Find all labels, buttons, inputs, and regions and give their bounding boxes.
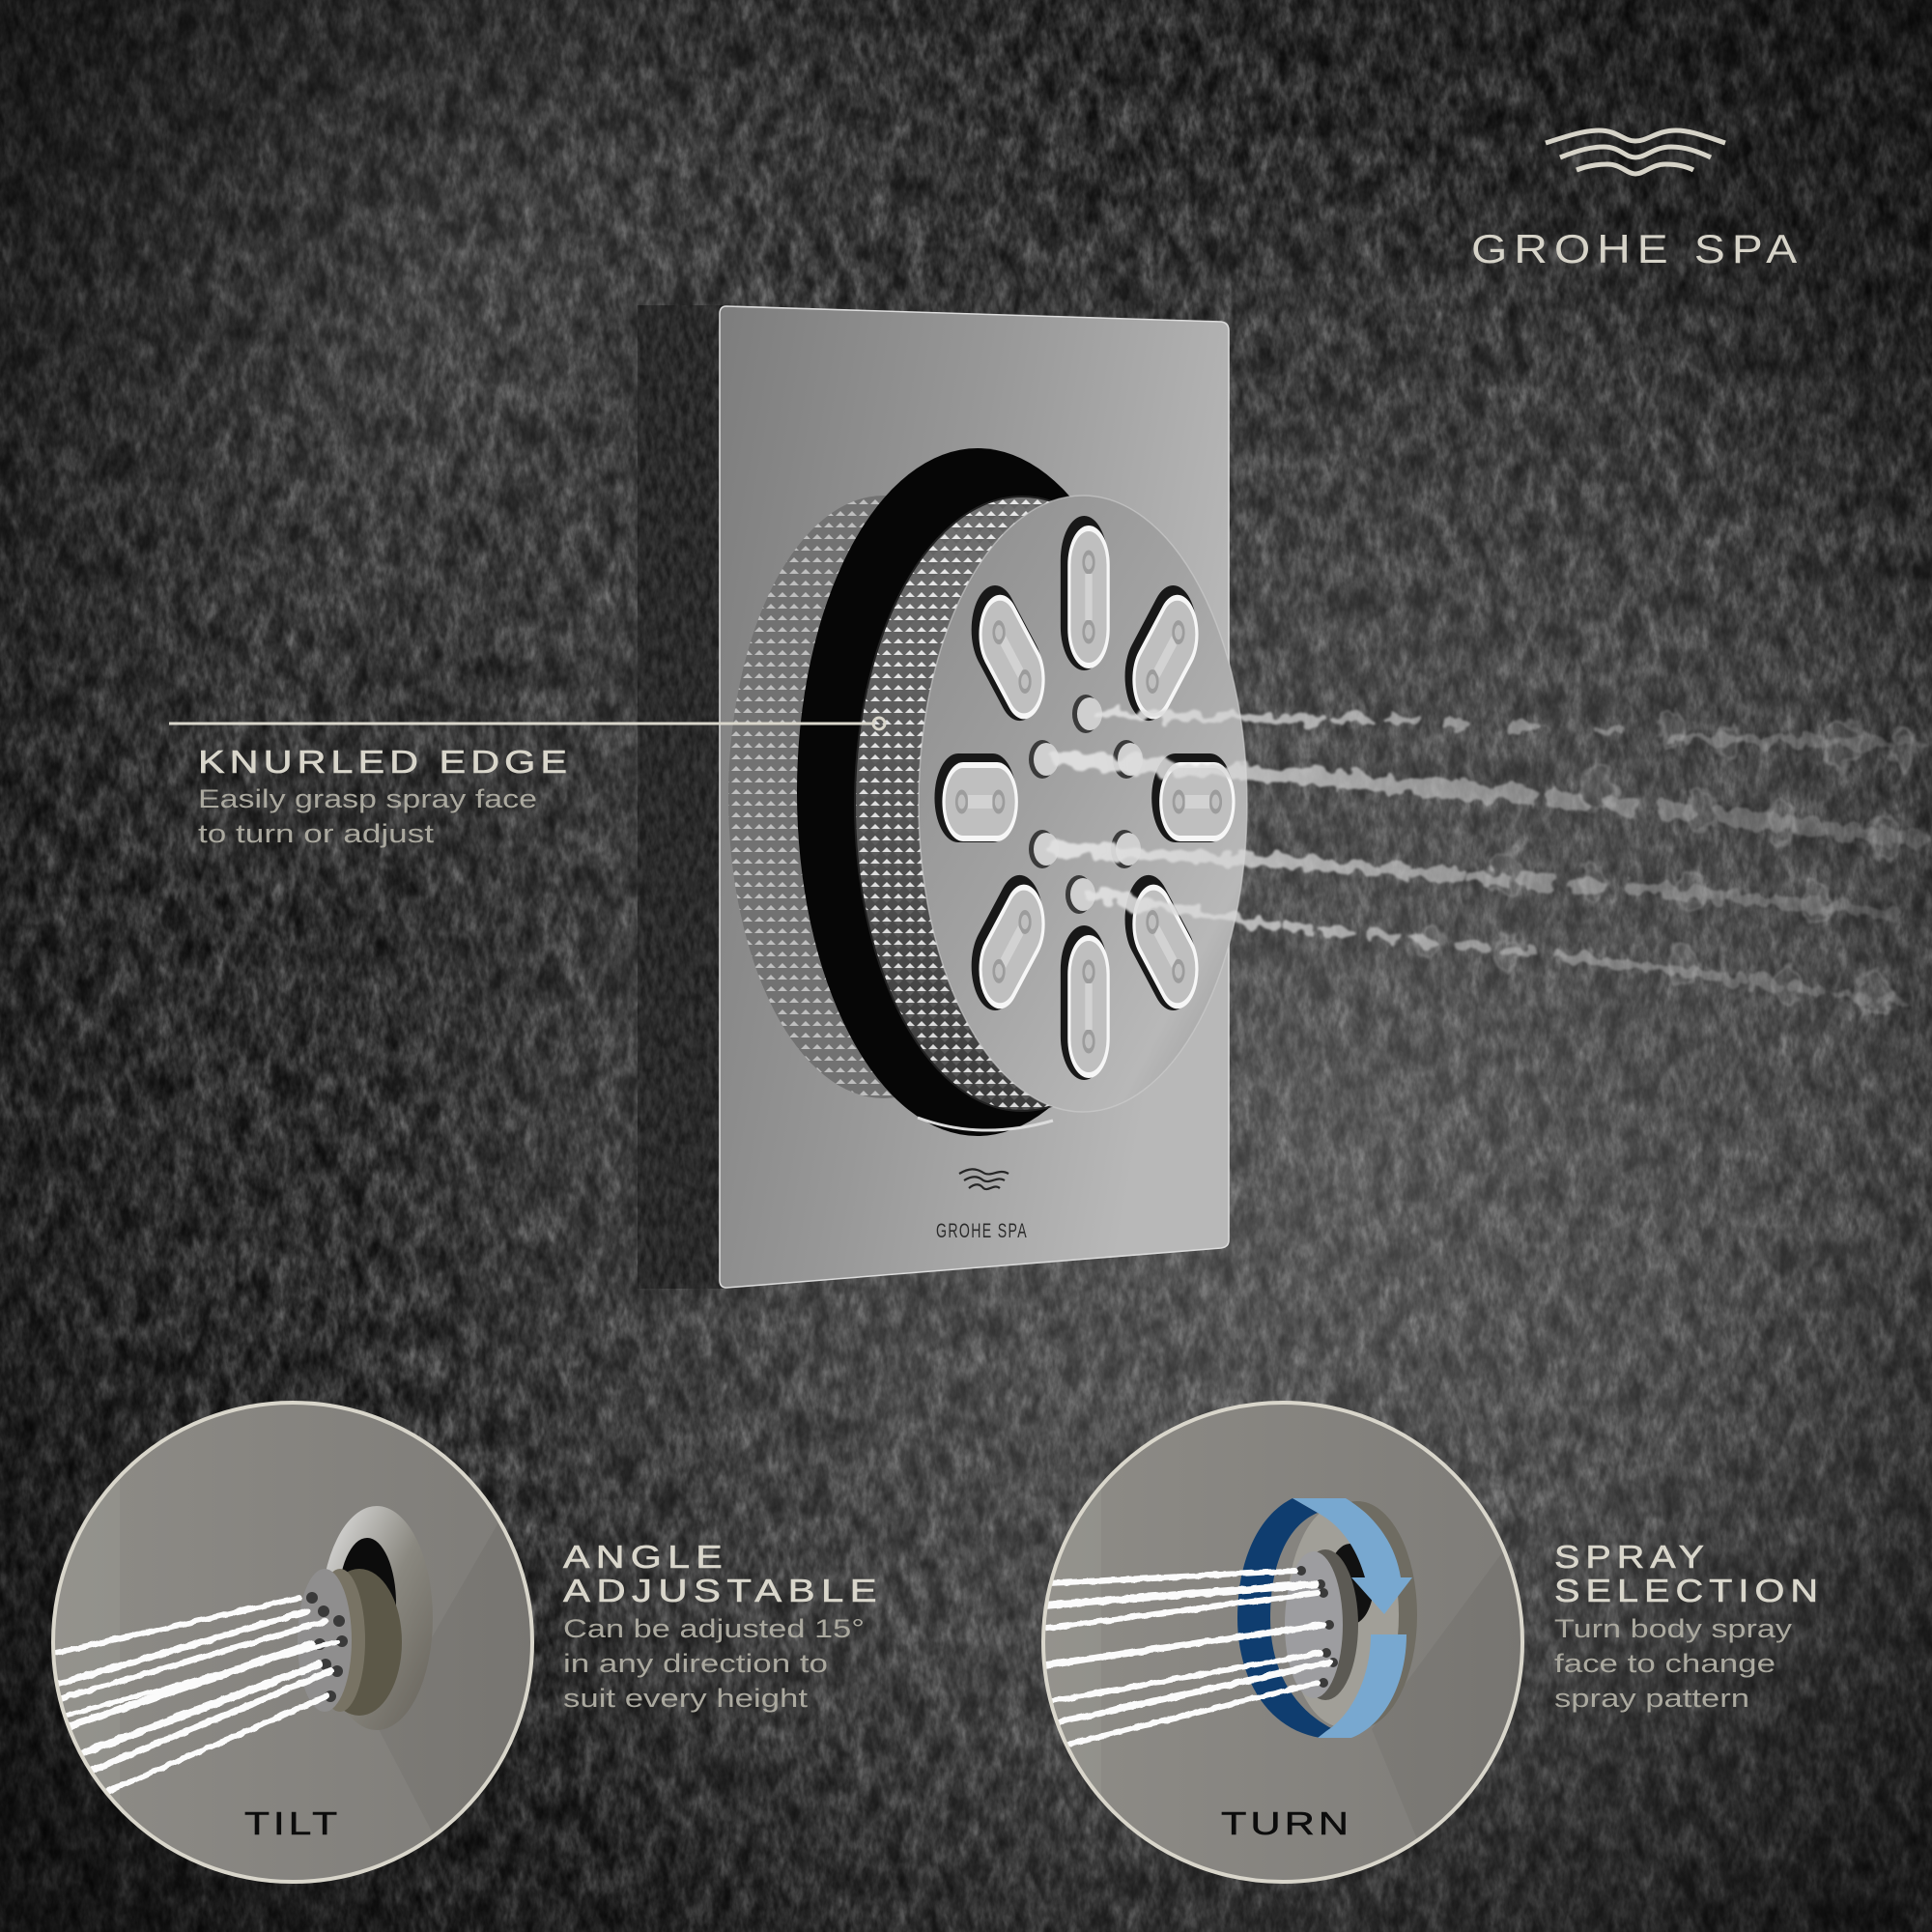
rear knurled ring (728, 496, 1039, 1098)
centre nozzles (1029, 695, 1143, 914)
text block: spray selection: SPRAY (1554, 1539, 1710, 1575)
wall niche panel (638, 305, 724, 1289)
front knurled band (855, 497, 1189, 1111)
jet streams (1055, 714, 1922, 1005)
turned head (1285, 1501, 1417, 1729)
water droplets (1416, 710, 1913, 1016)
text block: spray selection: spray pattern (1554, 1684, 1749, 1713)
callout leader line (169, 718, 885, 729)
circle border (1043, 1403, 1522, 1882)
wall tile seams (1043, 1401, 1536, 1893)
text block: angle adjustable: ADJUSTABLE (563, 1573, 883, 1608)
text block: spray selection: face to change (1554, 1649, 1776, 1678)
panel: tilt (48, 1401, 541, 1893)
water streams (1043, 1571, 1329, 1745)
icon: dark blue rotation arc (1237, 1498, 1333, 1738)
label: tilt: TILT (244, 1805, 341, 1841)
callout: knurled edge: to turn or adjust (198, 819, 435, 848)
callout: knurled edge (198, 744, 572, 848)
text block: spray selection (1554, 1539, 1824, 1713)
text block: angle adjustable (563, 1539, 883, 1713)
shower body spray product (638, 305, 1247, 1289)
text block: angle adjustable: Can be adjusted 15° (563, 1614, 865, 1643)
text block: angle adjustable: suit every height (563, 1684, 809, 1713)
circle border (53, 1403, 532, 1882)
brand logo: GROHE SPA (1471, 130, 1804, 271)
icon: light blue rotation arrow (1293, 1498, 1412, 1738)
icon: plate waves mark (959, 1169, 1009, 1189)
panel: turn (1043, 1401, 1536, 1893)
icon: waves logo (1546, 130, 1725, 174)
water streams (48, 1598, 338, 1793)
tilted head (298, 1506, 433, 1730)
plate wordmark: GROHE SPA (936, 1220, 1028, 1242)
logo wordmark: GROHE SPA (1471, 226, 1804, 271)
water jets (1055, 710, 1922, 1016)
text block: spray selection: Turn body spray (1554, 1614, 1793, 1643)
text block: spray selection: SELECTION (1554, 1573, 1824, 1608)
callout: knurled edge: KNURLED EDGE (198, 744, 572, 780)
chrome mounting plate (720, 306, 1229, 1288)
callout: knurled edge: Easily grasp spray face (198, 784, 537, 813)
wall tile seams (52, 1401, 541, 1893)
dark recess (797, 448, 1158, 1136)
label: turn: TURN (1221, 1805, 1352, 1841)
spray face disc (919, 496, 1247, 1112)
text block: angle adjustable: ANGLE (563, 1539, 728, 1575)
spray face slots (934, 516, 1236, 1080)
text block: angle adjustable: in any direction to (563, 1649, 828, 1678)
